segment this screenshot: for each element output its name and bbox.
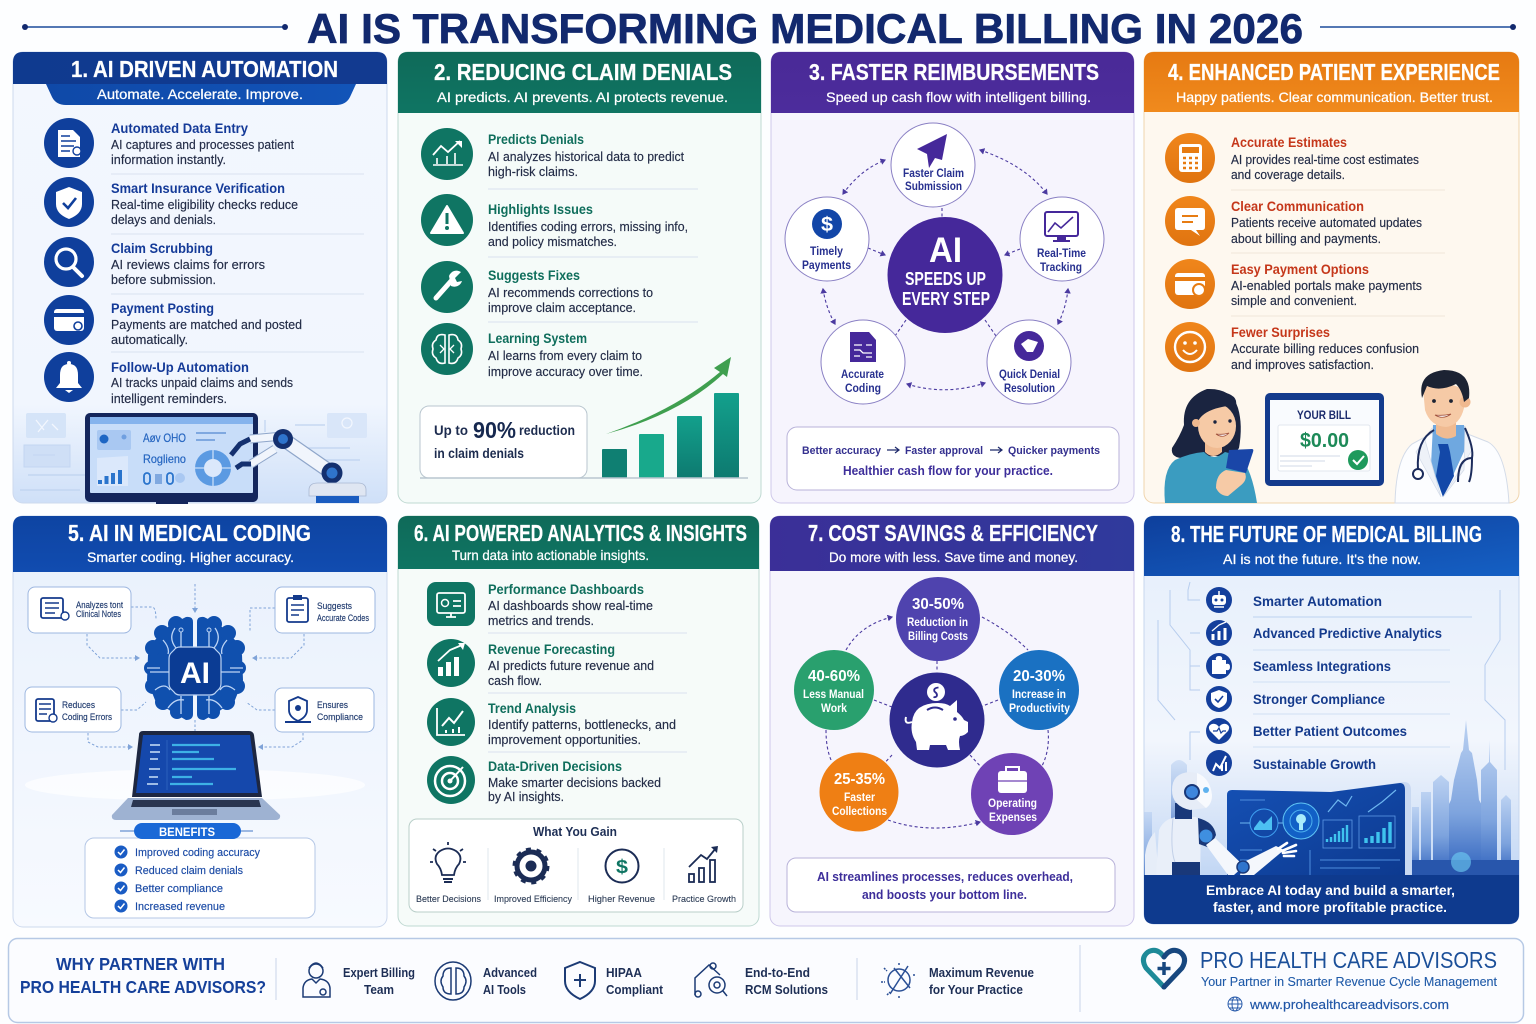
icon: revenue chart [427, 639, 475, 687]
node: quick denial resolution: Quick Denial [999, 369, 1060, 381]
tagline: Speed up cash flow with intelligent billing. [826, 89, 1091, 105]
tagline: Happy patients. Clear communication. Better trust. [1176, 89, 1493, 105]
item: follow-up automation: intelligent reminders. [111, 392, 227, 406]
stat: 40-60% [794, 650, 874, 730]
item: stronger compliance: Stronger Compliance [1253, 691, 1385, 707]
node: real-time tracking: Tracking [1040, 262, 1082, 274]
panel: 1 AI driven automation [13, 52, 387, 504]
box: analyzes clinical notes: Analyzes tont [76, 600, 123, 611]
node: timely payments: Timely [810, 246, 844, 258]
node: faster claim submission: Submission [905, 181, 962, 193]
stat: 40-60%: Less Manual [803, 689, 864, 701]
icon: brain [421, 323, 473, 375]
item: easy payment options: Easy Payment Options [1231, 262, 1369, 277]
node: quick denial resolution: Resolution [1004, 383, 1055, 395]
item: predicts denials: high-risk claims. [488, 165, 578, 179]
tagline: Do more with less. Save time and money. [829, 549, 1078, 565]
why partner heading: PRO HEALTH CARE ADVISORS? [20, 977, 266, 997]
box: what you gain: Better Decisions [416, 894, 481, 905]
icon: dashboard [427, 582, 475, 626]
heading: 2. REDUCING CLAIM DENIALS [434, 59, 732, 85]
item: better patient outcomes: Better Patient Outcomes [1253, 723, 1407, 739]
item: easy payment options: simple and convenient. [1231, 294, 1357, 308]
item: highlights issues: and policy mismatches. [488, 235, 617, 249]
item: clear communication: about billing and payments. [1231, 232, 1381, 246]
stat: 25-35%: Faster [844, 792, 875, 804]
item: predicts denials: AI analyzes historical data to predict [488, 150, 685, 164]
tagline: AI predicts. AI prevents. AI protects revenue. [437, 89, 728, 105]
item: fewer surprises: and improves satisfaction. [1231, 358, 1374, 372]
icon: card [1165, 259, 1215, 309]
stat: 25-35%: Collections [832, 806, 887, 818]
centre: AI speeds up every step: EVERY STEP [902, 289, 990, 309]
stat: 20-30% [999, 650, 1079, 730]
box: suggests accurate codes: Accurate Codes [317, 613, 369, 624]
illustration: monitor and robot arm [20, 413, 367, 504]
item: highlights issues: Identifies coding errors, missing info, [488, 220, 688, 234]
item: suggests fixes: AI recommends corrections to [488, 286, 653, 300]
icon: analytics [1206, 620, 1232, 646]
node: real-time tracking [1020, 197, 1104, 281]
stat: 25-35%: 25-35% [834, 771, 885, 788]
item: automated data entry: information instantly. [111, 153, 226, 167]
node: timely payments: Payments [802, 260, 851, 272]
item: claim scrubbing: before submission. [111, 273, 216, 287]
box: what you gain: What You Gain [533, 825, 617, 839]
item: performance dashboards: Performance Dashboards [488, 582, 644, 597]
box: ensures compliance [275, 688, 374, 732]
item: sustainable growth: Sustainable Growth [1253, 756, 1376, 772]
item: smart insurance verification: Smart Insurance Verification [111, 181, 285, 196]
box: what you gain: Higher Revenue [588, 894, 655, 905]
box: ensures compliance: Compliance [317, 712, 363, 723]
box: reduces coding errors [25, 687, 121, 732]
header bar [771, 52, 1134, 113]
tagline: AI is not the future. It's the now. [1223, 551, 1421, 567]
illustration: data screen [1227, 782, 1411, 875]
centre: AI speeds up every step [888, 217, 1002, 333]
connectors [87, 584, 304, 747]
icon: smile [1165, 322, 1215, 372]
item: trend analysis: improvement opportunities. [488, 733, 641, 747]
item: fewer surprises: Fewer Surprises [1231, 325, 1330, 340]
icon: document [44, 118, 94, 168]
benefit: maximum revenue: for Your Practice [929, 983, 1023, 997]
icon: target [427, 756, 475, 804]
icon: chat [1165, 196, 1215, 246]
panel: 5 AI in medical coding [13, 516, 387, 927]
benefit: HIPAA compliant: HIPAA [606, 966, 642, 980]
tagline: Smarter coding. Higher accuracy. [87, 549, 294, 565]
item: accurate estimates: and coverage details. [1231, 168, 1345, 182]
benefit: expert billing team [303, 963, 415, 997]
item: revenue forecasting: cash flow. [488, 674, 542, 688]
benefit: advanced AI tools: AI Tools [483, 983, 526, 997]
node: timely payments: $ [821, 214, 833, 236]
item: claim scrubbing: AI reviews claims for errors [111, 258, 265, 272]
item: data-driven decisions: Data-Driven Decisions [488, 759, 622, 774]
item: learning system: improve accuracy over time. [488, 365, 643, 379]
node: faster claim submission: Faster Claim [903, 168, 964, 180]
icon: heart [1206, 718, 1232, 744]
header bar [13, 516, 387, 572]
icon: gear [514, 849, 548, 883]
website: www.prohealthcareadvisors.com [1249, 997, 1449, 1012]
item: suggests fixes: Suggests Fixes [488, 268, 580, 283]
item: trend analysis: Trend Analysis [488, 701, 576, 716]
stat: 30-50%: Reduction in [907, 617, 968, 629]
flow arrows [823, 150, 1068, 390]
panel: 6 AI powered analytics and insights [398, 516, 759, 926]
heading: 3. FASTER REIMBURSEMENTS [809, 59, 1099, 85]
icon: piggy bank [890, 672, 984, 768]
benefit: end-to-end RCM: End-to-End [745, 966, 810, 980]
item: fewer surprises: Accurate billing reduces confusion [1231, 342, 1419, 356]
panel: 8 the future of medical billing [1144, 516, 1519, 924]
footer panel [8, 938, 1524, 1022]
callout: and boosts your bottom line. [862, 888, 1027, 902]
arrow: growth [606, 357, 731, 434]
why partner heading: WHY PARTNER WITH [56, 954, 225, 974]
item: follow-up automation: AI tracks unpaid claims and sends [111, 376, 293, 390]
item: payment posting [111, 301, 302, 347]
benefit: advanced AI tools: Advanced [483, 966, 537, 980]
centre: AI speeds up every step: AI [929, 231, 962, 270]
stat: 20-30%: Increase in [1012, 689, 1066, 701]
item: performance dashboards: metrics and trends. [488, 614, 594, 628]
item: smart insurance verification: Real-time eligibility checks reduce [111, 198, 298, 212]
logo: heart [1143, 950, 1185, 987]
box: reduces coding errors: Reduces [62, 700, 95, 711]
stat: 20-30%: Productivity [1009, 703, 1071, 715]
node: accurate coding: Accurate [841, 369, 884, 381]
header bar [1144, 516, 1519, 576]
closing message [1206, 882, 1455, 915]
callout: AI streamlines processes, reduces overhead, [817, 870, 1073, 884]
box: suggests accurate codes [275, 587, 375, 633]
node: real-time tracking: Real-Time [1037, 248, 1086, 260]
box: benefits: Better compliance [135, 883, 223, 895]
stat: 25-35% [820, 752, 898, 832]
benefit: advanced AI tools [435, 962, 537, 1000]
title rule right [1320, 24, 1516, 30]
item: accurate estimates [1231, 135, 1419, 182]
stat: 40-60%: 40-60% [808, 668, 860, 685]
box: analyzes clinical notes: Clinical Notes [76, 609, 121, 620]
callout [787, 858, 1115, 912]
title rule left [22, 24, 288, 30]
stat: operating expenses: Expenses [989, 812, 1037, 824]
header bar [398, 516, 759, 569]
panel: 7 cost savings and efficiency [770, 516, 1134, 926]
icon: dollar: $ [616, 857, 628, 878]
item: automated data entry: Automated Data Entry [111, 121, 248, 136]
item: accurate estimates: AI provides real-time cost estimates [1231, 153, 1419, 167]
callout: benefits chain: Healthier cash flow for your practice. [843, 464, 1053, 478]
item: claim scrubbing: Claim Scrubbing [111, 241, 213, 256]
tagline: Automate. Accelerate. Improve. [97, 86, 303, 102]
why partner heading [20, 954, 266, 997]
benefit: maximum revenue: Maximum Revenue [929, 966, 1034, 980]
header tab [46, 84, 356, 105]
closing message: Embrace AI today and build a smarter, [1206, 882, 1455, 898]
illustration: monitor and robot arm: Aøv OHO [143, 431, 186, 445]
item: smart insurance verification: delays and denials. [111, 213, 216, 227]
icon: AI brain: AI [180, 657, 210, 690]
icon: magnifier [44, 237, 94, 287]
item: automated data entry: AI captures and processes patient [111, 138, 294, 152]
callout: benefits chain: Better accuracy [802, 445, 882, 457]
bar chart [420, 393, 748, 478]
box: benefits: BENEFITS [159, 825, 215, 839]
item: payment posting: automatically. [111, 333, 188, 347]
item: data-driven decisions: by AI insights. [488, 790, 564, 804]
item: learning system: Learning System [488, 331, 587, 346]
node: quick denial resolution [987, 320, 1071, 404]
brand name: PRO HEALTH CARE ADVISORS [1200, 947, 1497, 973]
item: data-driven decisions [488, 759, 661, 804]
item: payment posting: Payments are matched and posted [111, 318, 302, 332]
item: clear communication: Patients receive automated updates [1231, 216, 1422, 230]
item: trend analysis: Identify patterns, bottlenecks, and [488, 718, 676, 732]
icon: payment card [44, 295, 94, 345]
benefit: maximum revenue [881, 963, 1034, 998]
node: timely payments [785, 197, 869, 281]
footer band [1144, 875, 1519, 924]
icon: warning [421, 194, 473, 246]
item: data-driven decisions: Make smarter decisions backed [488, 776, 661, 790]
stat: 30-50%: 30-50% [912, 596, 964, 613]
icon: trend chart [427, 698, 475, 746]
stat: 20-30%: 20-30% [1013, 668, 1065, 685]
centre: AI speeds up every step: SPEEDS UP [905, 269, 986, 289]
title: AI IS TRANSFORMING MEDICAL BILLING IN 2026 [307, 5, 1303, 52]
item: suggests fixes [488, 268, 653, 315]
callout: up to 90%: reduction [519, 423, 575, 438]
benefit: end-to-end RCM [695, 963, 828, 997]
item: automated data entry [111, 121, 294, 167]
box: reduces coding errors: Coding Errors [62, 712, 112, 723]
item: highlights issues: Highlights Issues [488, 202, 593, 217]
icon: lightbulb [430, 842, 466, 882]
callout: benefits chain: Faster approval [905, 445, 983, 457]
item: performance dashboards [488, 582, 653, 628]
icon: growth [1206, 750, 1232, 776]
panel: 2 reducing claim denials [398, 52, 761, 503]
item: advanced predictive analytics: Advanced Predictive Analytics [1253, 625, 1442, 641]
icon: shield [44, 177, 94, 227]
item: predicts denials: Predicts Denials [488, 132, 584, 147]
illustration: your bill: $0.00 [1300, 430, 1349, 452]
connectors [826, 617, 1048, 828]
item: smart insurance verification [111, 181, 298, 227]
stat: 40-60%: Work [821, 703, 848, 715]
item: trend analysis [488, 701, 676, 747]
item: claim scrubbing [111, 241, 265, 287]
box: what you gain: Practice Growth [672, 894, 736, 905]
item: revenue forecasting [488, 642, 654, 688]
illustration: laptop [25, 731, 365, 820]
box: what you gain: Improved Efficiency [494, 894, 572, 905]
box: benefits [85, 823, 315, 918]
icon: puzzle [1206, 653, 1232, 679]
item: seamless integrations: Seamless Integrations [1253, 658, 1391, 674]
stat: operating expenses: Operating [988, 798, 1037, 810]
item: easy payment options: AI-enabled portals make payments [1231, 279, 1422, 293]
item: revenue forecasting: Revenue Forecasting [488, 642, 615, 657]
benefit: HIPAA compliant: Compliant [606, 983, 664, 997]
tagline: Turn data into actionable insights. [452, 547, 649, 563]
callout: benefits chain: Quicker payments [1008, 445, 1100, 457]
icon: calculator [1165, 133, 1215, 183]
illustration: city skyline [1144, 720, 1511, 875]
stat: 30-50%: Billing Costs [908, 631, 968, 643]
icon: growth bars [689, 846, 718, 882]
closing message: faster, and more profitable practice. [1213, 899, 1447, 915]
item: fewer surprises [1231, 325, 1419, 372]
item: accurate estimates: Accurate Estimates [1231, 135, 1347, 150]
benefit: HIPAA compliant [565, 962, 664, 999]
callout: up to 90% [420, 406, 587, 478]
box: ensures compliance: Ensures [317, 700, 348, 711]
icon: AI brain [144, 616, 246, 720]
box: what you gain [409, 819, 743, 912]
illustration: your bill [1265, 393, 1384, 486]
header bar [398, 52, 761, 113]
item: revenue forecasting: AI predicts future revenue and [488, 659, 654, 673]
box: suggests accurate codes: Suggests [317, 601, 352, 612]
node: faster claim submission [891, 123, 975, 207]
benefit: end-to-end RCM: RCM Solutions [745, 983, 828, 997]
item: learning system: AI learns from every claim to [488, 349, 642, 363]
item: learning system [488, 331, 643, 379]
callout: up to 90%: Up to [434, 423, 468, 438]
item: follow-up automation [111, 360, 293, 406]
item: smarter automation: Smarter Automation [1253, 593, 1382, 609]
illustration: doctor [1395, 370, 1509, 503]
node: accurate coding [821, 320, 905, 404]
panel: 3 faster reimbursements [771, 52, 1134, 503]
stat: operating expenses [971, 753, 1053, 835]
illustration: monitor and robot arm: Roglieno [143, 452, 186, 466]
box: benefits: Improved coding accuracy [135, 847, 260, 859]
item: payment posting: Payment Posting [111, 301, 214, 316]
header bar [13, 52, 387, 84]
callout: up to 90%: 90% [473, 417, 516, 443]
item: clear communication: Clear Communication [1231, 199, 1364, 214]
benefit: expert billing team: Team [364, 983, 394, 997]
icon: robot [1206, 587, 1232, 613]
box: benefits: Increased revenue [135, 901, 225, 913]
item: predicts denials [488, 132, 685, 179]
item: suggests fixes: improve claim acceptance. [488, 301, 636, 315]
illustration: your bill: YOUR BILL [1297, 410, 1351, 422]
icon: globe [1228, 997, 1242, 1011]
item: clear communication [1231, 199, 1422, 246]
header bar [1144, 52, 1519, 112]
icon: wrench [421, 261, 473, 313]
box: benefits: Reduced claim denials [135, 865, 243, 877]
brand tagline: Your Partner in Smarter Revenue Cycle Management [1201, 975, 1498, 989]
node: accurate coding: Coding [845, 383, 881, 395]
heading: 1. AI DRIVEN AUTOMATION [71, 56, 338, 82]
box: analyzes clinical notes [28, 587, 131, 633]
heading: 6. AI POWERED ANALYTICS & INSIGHTS [414, 520, 747, 546]
stat: 30-50% [896, 577, 980, 661]
icon: compliance shield [1206, 686, 1232, 712]
item: highlights issues [488, 202, 688, 249]
icon: dollar [606, 850, 638, 882]
illustration: robot [1145, 772, 1296, 875]
item: follow-up automation: Follow-Up Automation [111, 360, 249, 375]
header bar [770, 516, 1134, 571]
heading: 7. COST SAVINGS & EFFICIENCY [808, 520, 1098, 546]
panel: 4 enhanced patient experience [1144, 52, 1519, 503]
item: performance dashboards: AI dashboards show real-time [488, 599, 653, 613]
icon: bell [44, 352, 94, 402]
benefit: expert billing team: Expert Billing [343, 966, 415, 980]
icon: rising chart [421, 128, 473, 180]
illustration: patient with phone [1164, 389, 1257, 503]
callout: benefits chain [787, 427, 1119, 490]
heading: 5. AI IN MEDICAL CODING [68, 520, 311, 546]
item: easy payment options [1231, 262, 1422, 308]
callout: up to 90%: in claim denials [434, 446, 524, 461]
